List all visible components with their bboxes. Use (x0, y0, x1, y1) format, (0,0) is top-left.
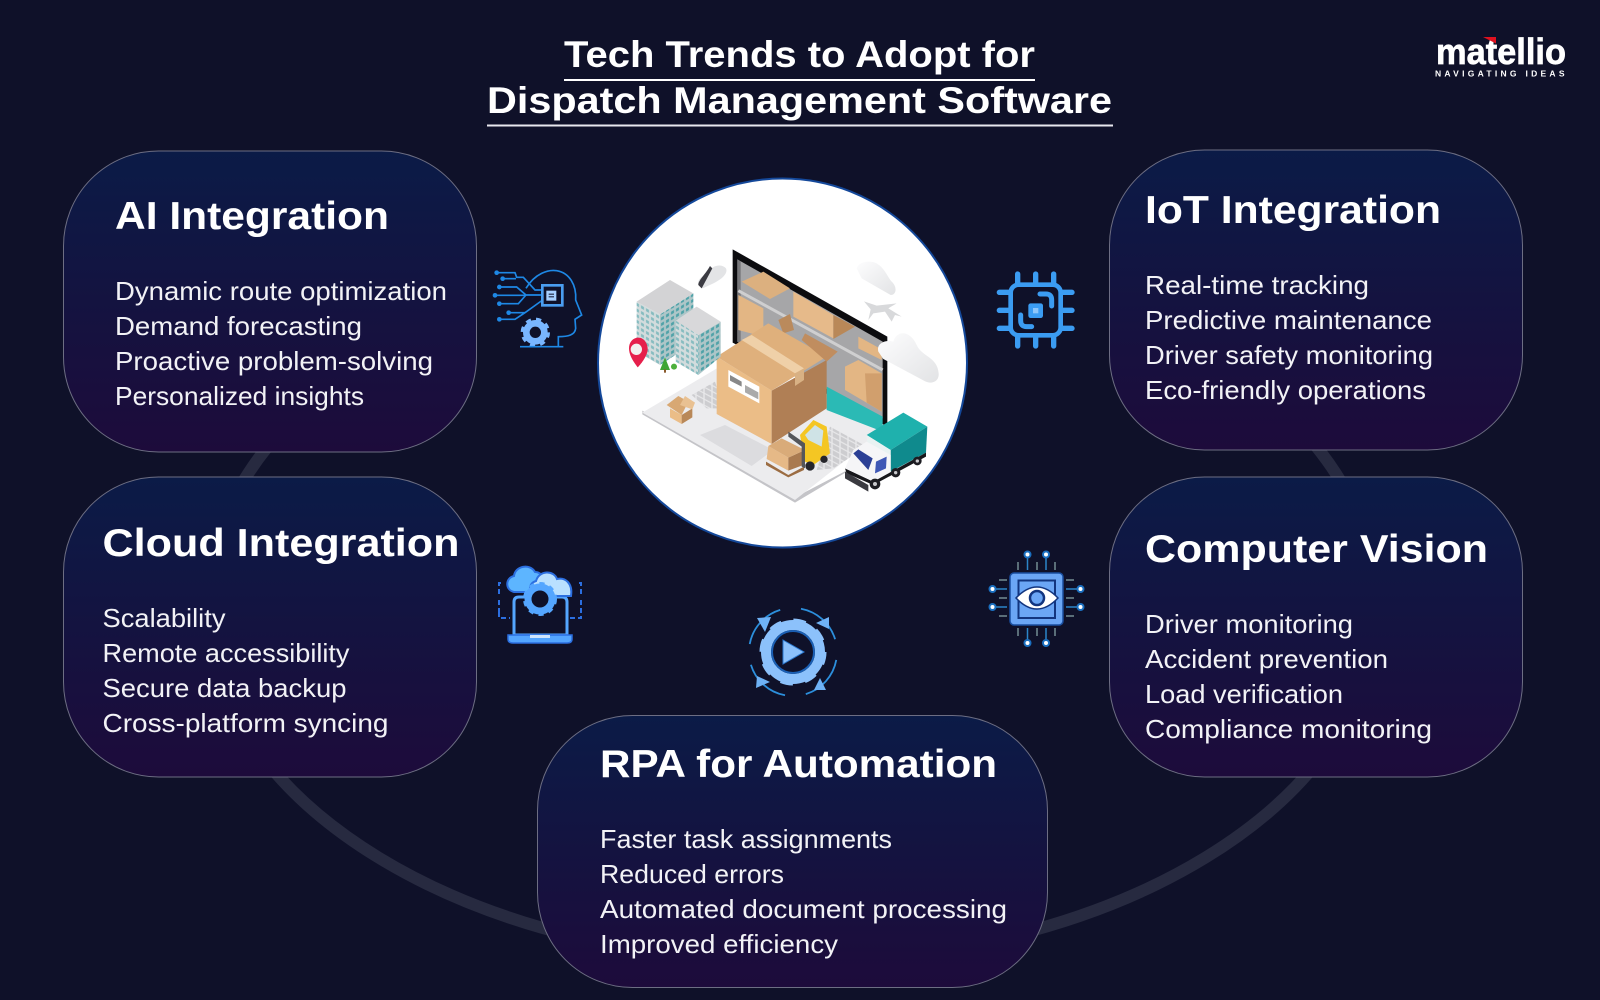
icon: eye on chip (990, 552, 1084, 646)
list: AI Integration benefits: Demand forecasting (115, 311, 362, 341)
forklift (788, 420, 830, 471)
list: AI Integration benefits (115, 276, 447, 411)
heading: IoT Integration: IoT Integration (1145, 189, 1441, 232)
panel: Cloud Integration (64, 477, 476, 777)
list: IoT Integration benefits: Predictive maintenance (1145, 305, 1432, 335)
icon: IoT chip (999, 274, 1072, 346)
laptop screen with shelves (733, 249, 887, 432)
dark cloud (698, 265, 726, 288)
list: IoT Integration benefits (1145, 270, 1433, 405)
list: Computer Vision benefits: Load verification (1145, 679, 1343, 709)
title: Dispatch Management Software (487, 80, 1112, 121)
pallet of boxes (766, 438, 805, 477)
panel: Computer Vision (1110, 477, 1522, 777)
list: RPA benefits: Faster task assignments (600, 824, 892, 854)
logo: matellio: NAVIGATING IDEAS (1435, 68, 1565, 78)
list: Computer Vision benefits: Compliance monitoring (1145, 714, 1432, 744)
list: Cloud Integration benefits (102, 603, 388, 738)
icon: cloud and laptop (499, 567, 581, 643)
list: Cloud Integration benefits: Scalability (102, 603, 226, 633)
heading: Computer Vision: Computer Vision (1145, 528, 1488, 571)
icon: AI head with chip and gear (493, 270, 582, 347)
list: Cloud Integration benefits: Remote accessibility (102, 638, 350, 668)
connecting ring (240, 450, 1344, 936)
list: RPA benefits: Automated document processing (600, 894, 1007, 924)
logo: matellio: matellio (1436, 31, 1566, 72)
list: RPA benefits: Reduced errors (600, 859, 784, 889)
list: RPA benefits (600, 824, 1007, 959)
title: Tech Trends to Adopt for (564, 34, 1035, 75)
list: Cloud Integration benefits: Secure data backup (102, 673, 346, 703)
heading: Cloud Integration: Cloud Integration (102, 522, 460, 565)
pale clouds (857, 262, 939, 383)
list: AI Integration benefits: Proactive problem-solving (115, 346, 433, 376)
list: AI Integration benefits: Dynamic route optimization (115, 276, 447, 306)
airplane (864, 301, 902, 322)
large cardboard box (717, 323, 838, 444)
map pin and trees (629, 338, 677, 373)
central circle illustration (598, 178, 967, 548)
icon: gear with play arrow (749, 608, 837, 696)
small open box (667, 396, 695, 424)
buildings (637, 280, 721, 375)
list: Cloud Integration benefits: Cross-platform syncing (102, 708, 388, 738)
list: IoT Integration benefits: Real-time tracking (1145, 270, 1369, 300)
delivery truck (845, 413, 927, 492)
panel: RPA for Automation (538, 716, 1048, 988)
list: AI Integration benefits: Personalized insights (115, 381, 364, 411)
list: Computer Vision benefits: Driver monitoring (1145, 609, 1353, 639)
list: Computer Vision benefits: Accident prevention (1145, 644, 1388, 674)
list: Computer Vision benefits (1145, 609, 1432, 744)
panel: AI Integration (64, 151, 476, 452)
list: RPA benefits: Improved efficiency (600, 929, 838, 959)
title (487, 34, 1113, 126)
list: IoT Integration benefits: Driver safety monitoring (1145, 340, 1433, 370)
heading: AI Integration: AI Integration (115, 195, 389, 238)
panel: IoT Integration (1110, 150, 1522, 450)
list: IoT Integration benefits: Eco-friendly operations (1145, 375, 1426, 405)
laptop base (642, 357, 888, 503)
heading: RPA for Automation: RPA for Automation (600, 743, 997, 786)
